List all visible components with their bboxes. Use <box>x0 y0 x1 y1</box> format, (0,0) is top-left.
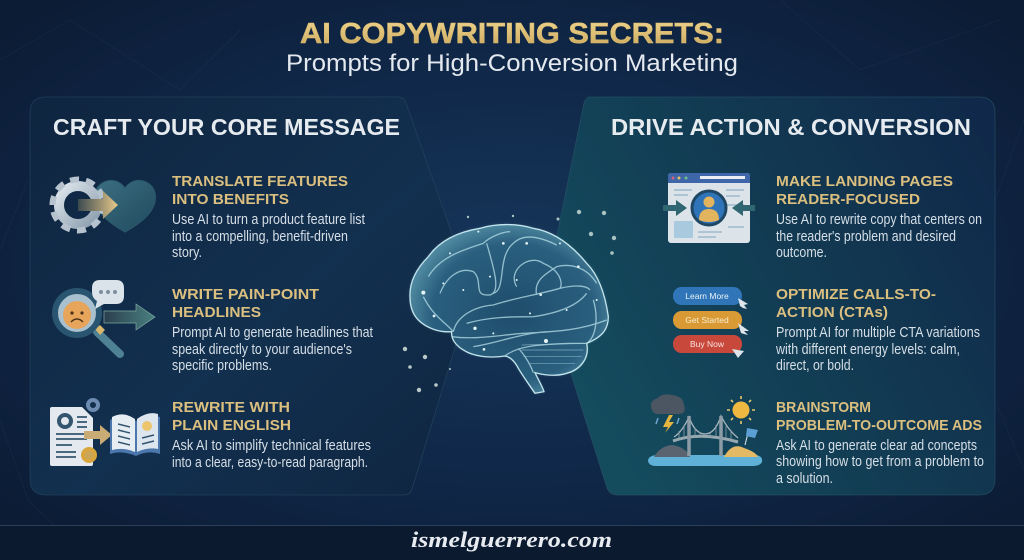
icon: browser with reader <box>663 173 755 243</box>
text: translate features: Use AI to turn a product feature list <box>172 211 366 228</box>
text: pain-point headlines <box>172 287 374 374</box>
icon: cta buttons <box>673 287 749 358</box>
icon: cta buttons: Learn More <box>685 291 729 301</box>
item: calls to action <box>673 287 980 374</box>
text: problem to outcome: a solution. <box>776 470 833 487</box>
text: calls to action: Prompt AI for multiple CTA variations <box>776 324 980 341</box>
brain illustration <box>410 225 608 393</box>
icon: cta buttons: Buy Now <box>690 339 725 349</box>
text: pain-point headlines: WRITE PAIN-POINT <box>172 287 319 303</box>
item: translate features <box>52 174 366 261</box>
text: translate features <box>172 174 366 261</box>
text: plain english: REWRITE WITH <box>172 400 290 416</box>
footer bar <box>0 525 1024 560</box>
text: pain-point headlines: Prompt AI to generate headlines that <box>172 324 374 341</box>
heading: craft: CRAFT YOUR CORE MESSAGE <box>53 114 400 140</box>
text: translate features: INTO BENEFITS <box>172 192 289 208</box>
icon: magnifier with worried face <box>55 280 155 354</box>
heading: drive: DRIVE ACTION & CONVERSION <box>611 114 971 140</box>
icon: cta buttons: Get Started <box>685 315 729 325</box>
item: pain-point headlines <box>55 280 374 374</box>
item: plain english <box>50 400 371 471</box>
text: calls to action <box>775 287 980 374</box>
text: translate features: TRANSLATE FEATURES <box>172 174 348 190</box>
text: problem to outcome: showing how to get from a problem to <box>776 453 984 470</box>
text: translate features: story. <box>172 244 202 261</box>
text: plain english: PLAIN ENGLISH <box>172 418 291 434</box>
subtitle: Prompts for High-Conversion Marketing <box>286 50 738 77</box>
text: pain-point headlines: speak directly to your audience's <box>172 341 352 358</box>
text: problem to outcome <box>776 400 984 487</box>
text: calls to action: direct, or bold. <box>776 357 854 374</box>
text: plain english: Ask AI to simplify technical features <box>172 437 371 454</box>
icon: document to book <box>50 400 160 466</box>
icon: storm, bridge and sun <box>648 394 762 466</box>
text: landing pages: the reader's problem and desired <box>776 228 956 245</box>
text: calls to action: OPTIMIZE CALLS-TO- <box>776 287 936 303</box>
neural nodes left <box>403 347 451 392</box>
text: landing pages <box>776 174 982 261</box>
footer url: ismelguerrero.com <box>411 527 612 552</box>
text: plain english <box>172 400 371 471</box>
text: landing pages: outcome. <box>776 244 827 261</box>
text: pain-point headlines: HEADLINES <box>172 305 261 321</box>
text: plain english: into a clear, easy-to-read paragraph. <box>172 454 368 471</box>
title <box>286 18 738 77</box>
title: AI COPYWRITING SECRETS: <box>300 18 724 50</box>
text: problem to outcome: Ask AI to generate clear ad concepts <box>776 437 977 454</box>
text: calls to action: ACTION (CTAs) <box>776 305 888 321</box>
icon: gear to heart <box>52 180 155 232</box>
text: landing pages: MAKE LANDING PAGES <box>776 174 953 190</box>
text: landing pages: Use AI to rewrite copy that centers on <box>776 211 982 228</box>
item: problem to outcome <box>648 394 984 487</box>
panel: craft your core message <box>30 97 471 495</box>
text: pain-point headlines: specific problems. <box>172 357 272 374</box>
neural nodes right <box>467 210 616 255</box>
text: translate features: into a compelling, benefit-driven <box>172 228 348 245</box>
text: problem to outcome: PROBLEM-TO-OUTCOME ADS <box>776 418 982 434</box>
text: landing pages: READER-FOCUSED <box>776 192 920 208</box>
text: calls to action: with different energy levels: calm, <box>775 341 960 358</box>
item: landing pages <box>663 173 982 261</box>
text: problem to outcome: BRAINSTORM <box>776 400 871 416</box>
panel: drive action and conversion <box>546 97 995 495</box>
